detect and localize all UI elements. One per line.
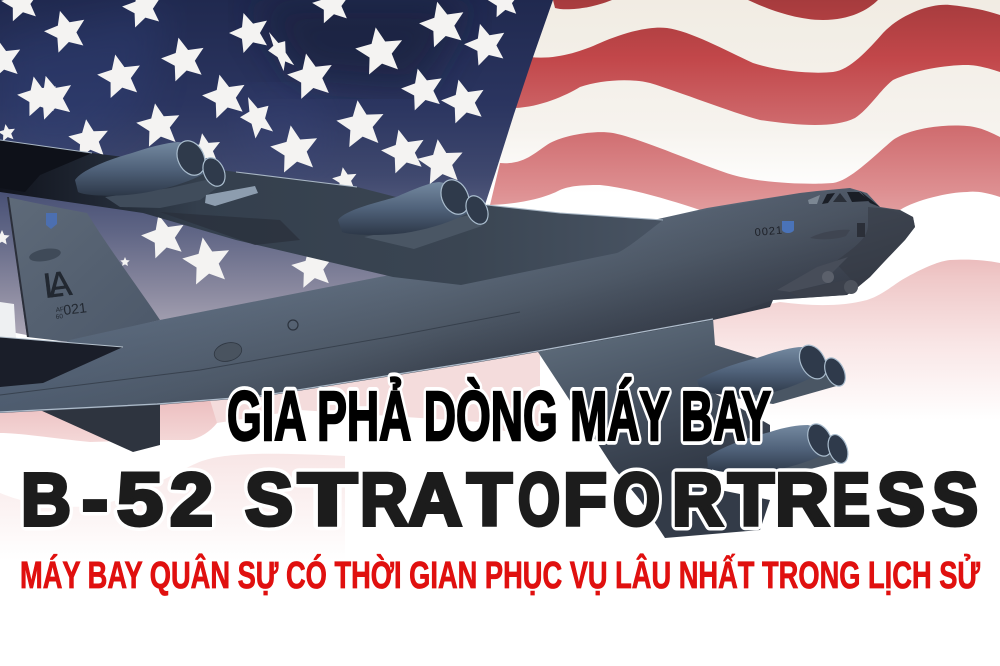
- wing engines: [75, 136, 852, 480]
- heading: B-52 STRATOFORTRESS: 2: [170, 458, 213, 541]
- tail fin: [7, 197, 160, 342]
- heading: B-52 STRATOFORTRESS: F: [563, 458, 607, 541]
- heading: B-52 STRATOFORTRESS: -: [82, 458, 108, 541]
- heading: B-52 STRATOFORTRESS: 2: [170, 458, 213, 541]
- heading: B-52 STRATOFORTRESS: R: [775, 458, 829, 541]
- nose blisters and chin pods: [777, 223, 865, 298]
- heading: B-52 STRATOFORTRESS: R: [672, 458, 723, 541]
- heading: B-52 STRATOFORTRESS: S: [877, 458, 925, 541]
- heading: B-52 STRATOFORTRESS: E: [832, 458, 870, 541]
- far wing under fuselage: [538, 318, 770, 538]
- heading: B-52 STRATOFORTRESS: 5: [117, 458, 163, 541]
- heading: B-52 STRATOFORTRESS: S: [245, 458, 293, 541]
- cockpit windows: [808, 191, 880, 207]
- heading: B-52 STRATOFORTRESS: F: [563, 458, 607, 541]
- heading: B-52 STRATOFORTRESS: R: [672, 458, 723, 541]
- heading: B-52 STRATOFORTRESS: B: [21, 458, 71, 541]
- heading: B-52 STRATOFORTRESS: R: [775, 458, 829, 541]
- heading: B-52 STRATOFORTRESS: S: [877, 458, 925, 541]
- aircraft number 0021 and emblem: 0021: [754, 225, 784, 239]
- heading: B-52 STRATOFORTRESS: B: [21, 458, 71, 541]
- heading: B-52 STRATOFORTRESS: T: [298, 458, 357, 541]
- fuselage: [0, 188, 915, 413]
- flag: blue canton: [0, 0, 553, 360]
- rear horizontal stabilizer: [0, 337, 123, 387]
- heading: B-52 STRATOFORTRESS: R: [360, 458, 408, 541]
- near wing: [0, 140, 663, 285]
- aircraft number 0021 and emblem: [754, 221, 794, 239]
- tail fin: LA: [41, 264, 74, 306]
- flag: white stars: [0, 0, 522, 289]
- heading: B-52 STRATOFORTRESS: E: [832, 458, 870, 541]
- heading: B-52 STRATOFORTRESS: T: [728, 458, 774, 541]
- heading: B-52 STRATOFORTRESS: A: [408, 458, 462, 541]
- heading: B-52 STRATOFORTRESS: O: [518, 458, 560, 541]
- heading: B-52 STRATOFORTRESS: O: [613, 458, 660, 541]
- heading: B-52 STRATOFORTRESS: O: [613, 458, 660, 541]
- heading: B-52 STRATOFORTRESS: O: [518, 458, 560, 541]
- heading: B-52 STRATOFORTRESS: [21, 458, 978, 541]
- heading: B-52 STRATOFORTRESS: S: [932, 458, 978, 541]
- tail fin: AF: [55, 306, 65, 314]
- heading: B-52 STRATOFORTRESS: S: [245, 458, 293, 541]
- heading: B-52 STRATOFORTRESS: T: [467, 458, 512, 541]
- heading: B-52 STRATOFORTRESS: T: [298, 458, 357, 541]
- heading: B-52 STRATOFORTRESS: R: [360, 458, 408, 541]
- B-52 bomber aircraft: [0, 136, 915, 538]
- lower horizontal stabilizer: [40, 404, 160, 452]
- flag: pale lower stripes behind tail: [0, 350, 540, 560]
- flag stripes: [490, 0, 1000, 420]
- tail fin: 021: [62, 299, 88, 318]
- heading: B-52 STRATOFORTRESS: 5: [117, 458, 163, 541]
- heading: B-52 STRATOFORTRESS: T: [467, 458, 512, 541]
- tail fin: 60: [55, 313, 64, 321]
- heading: B-52 STRATOFORTRESS: S: [932, 458, 978, 541]
- heading: B-52 STRATOFORTRESS: T: [728, 458, 774, 541]
- heading: B-52 STRATOFORTRESS: -: [82, 458, 108, 541]
- heading: B-52 STRATOFORTRESS: A: [408, 458, 462, 541]
